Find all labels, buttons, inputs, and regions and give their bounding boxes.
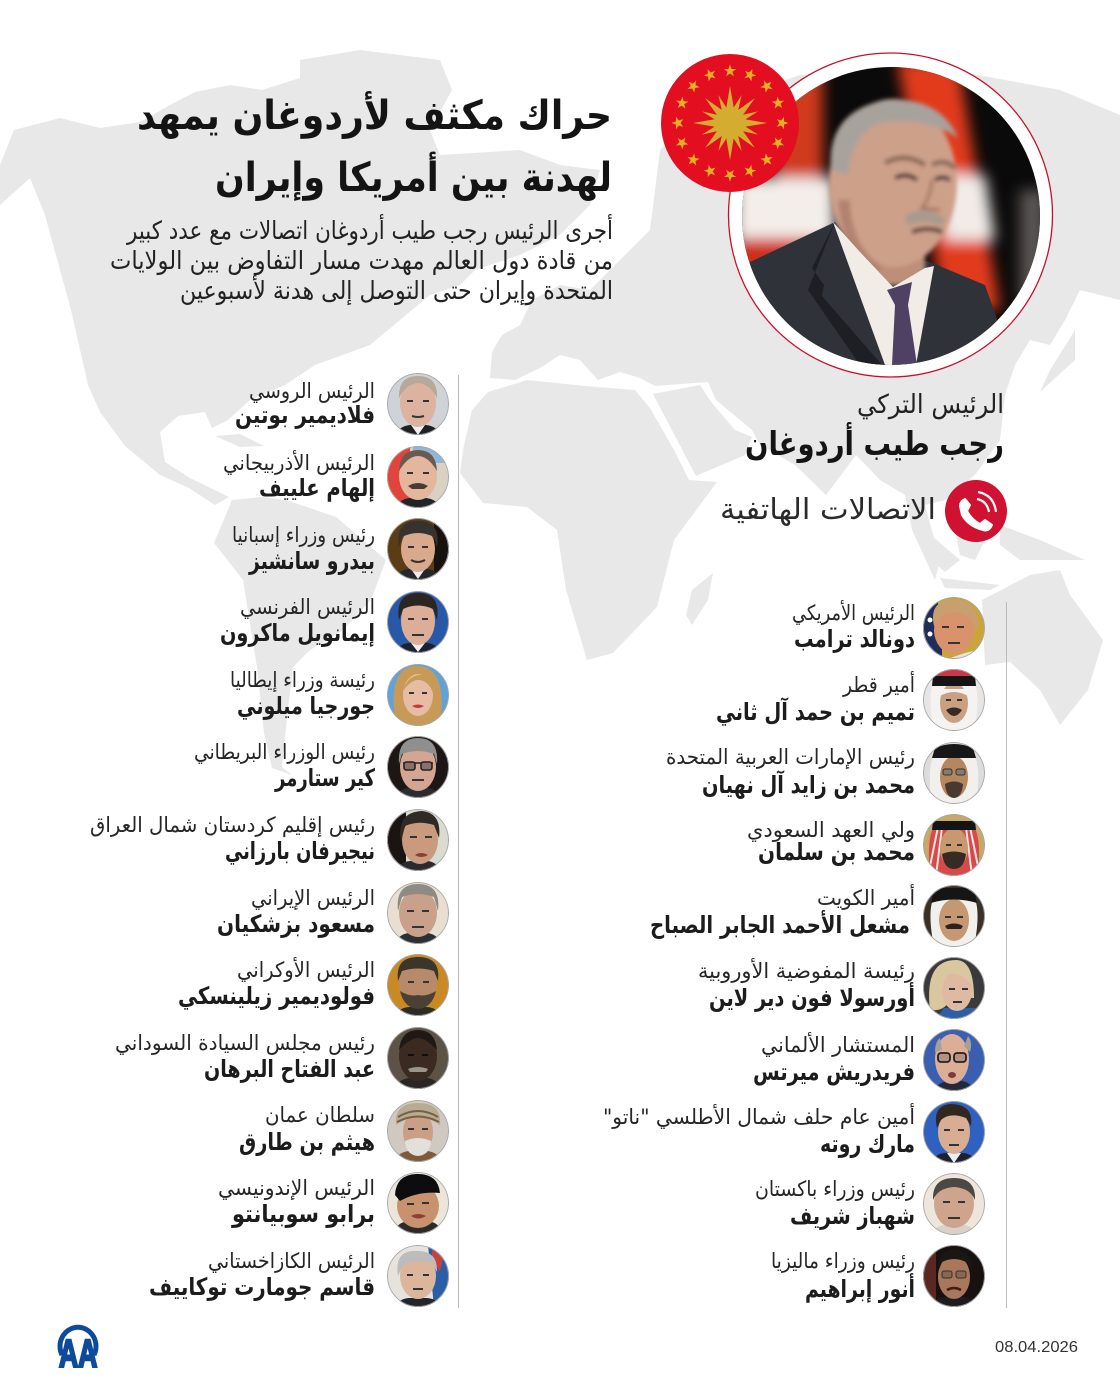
logo: Anadolu Agency: AA	[59, 1333, 97, 1376]
date: 08.04.2026	[995, 1339, 1078, 1356]
person: Barzani: نيجيرفان بارزاني	[225, 837, 375, 865]
person: Mishal	[650, 884, 985, 947]
Erdogan role and name: الرئيس التركي	[857, 390, 1004, 420]
title	[137, 90, 612, 201]
person: Prabowo: الرئيس الإندونيسي	[218, 1176, 375, 1200]
person: Macron	[220, 591, 449, 653]
person: Aliyev: الرئيس الأذربيجاني	[223, 450, 375, 475]
person: von der Leyen	[698, 957, 985, 1019]
person: Burhan: رئيس مجلس السيادة السوداني	[115, 1031, 375, 1055]
person: Prabowo: برابو سوبيانتو	[231, 1200, 375, 1228]
person: Starmer: رئيس الوزراء البريطاني	[194, 740, 375, 764]
person: Merz: المستشار الألماني	[761, 1032, 915, 1057]
person: Haitham: سلطان عمان	[265, 1103, 375, 1127]
person: Aliyev: إلهام علييف	[259, 474, 375, 502]
person: Pezeshkian: الرئيس الإيراني	[251, 886, 375, 910]
person: Prabowo	[218, 1172, 449, 1234]
person: Tamim: تميم بن حمد آل ثاني	[716, 697, 915, 726]
person: Zelensky	[178, 954, 449, 1016]
intro paragraph	[110, 213, 613, 306]
person: Sanchez: رئيس وزراء إسبانيا	[232, 523, 375, 548]
person: Burhan: عبد الفتاح البرهان	[204, 1055, 375, 1083]
person: Mohammed bin Salman: ولي العهد السعودي	[747, 818, 915, 842]
icon: phone	[945, 480, 1007, 542]
person: Starmer	[194, 736, 449, 798]
person: Anwar	[771, 1245, 985, 1307]
person: Pezeshkian: مسعود بزشكيان	[217, 910, 375, 938]
world map background	[0, 50, 1120, 775]
person: Anwar: رئيس وزراء ماليزيا	[771, 1249, 915, 1273]
person: Sharif	[755, 1173, 985, 1235]
person: Barzani: رئيس إقليم كردستان شمال العراق	[90, 813, 375, 838]
person: Macron: الرئيس الفرنسي	[240, 595, 375, 619]
person: Sharif: رئيس وزراء باكستان	[755, 1177, 915, 1201]
person: Anwar: أنور إبراهيم	[805, 1273, 915, 1303]
person: Haitham	[239, 1100, 449, 1162]
person: Rutte: مارك روته	[820, 1130, 915, 1158]
person: Trump	[792, 597, 985, 659]
person: Tamim: أمير قطر	[842, 671, 915, 697]
person: Haitham: هيثم بن طارق	[239, 1128, 375, 1156]
title: حراك مكثف لأردوغان يمهد	[137, 90, 612, 139]
person: Mohammed bin Salman: محمد بن سلمان	[758, 838, 915, 866]
intro paragraph: المتحدة وإيران حتى التوصل إلى هدنة لأسبوعين	[180, 274, 613, 306]
person: Mohamed bin Zayed: رئيس الإمارات العربية المتحدة	[666, 745, 915, 769]
title: لهدنة بين أمريكا وإيران	[215, 151, 612, 201]
person: Meloni: جورجيا ميلوني	[237, 692, 375, 720]
person: Starmer: كير ستارمر	[274, 764, 375, 792]
person: Pezeshkian	[217, 882, 449, 944]
person: Mishal: أمير الكويت	[817, 884, 915, 910]
Erdogan role and name	[745, 390, 1004, 464]
portrait: Erdogan	[728, 53, 1052, 380]
person: Sharif: شهباز شريف	[790, 1202, 915, 1230]
heading: phone calls: الاتصالات الهاتفية	[720, 492, 936, 526]
person: Burhan	[115, 1027, 449, 1089]
person: Tokayev: قاسم جومارت توكاييف	[149, 1273, 375, 1301]
person: Tokayev	[149, 1245, 449, 1307]
person: Putin: الرئيس الروسي	[249, 379, 375, 403]
person: Trump: الرئيس الأمريكي	[792, 600, 915, 625]
person: Tamim	[716, 666, 985, 731]
person: Zelensky: فولوديمير زيلينسكي	[178, 982, 375, 1010]
person: Zelensky: الرئيس الأوكراني	[237, 957, 375, 982]
intro paragraph: أجرى الرئيس رجب طيب أردوغان اتصالات مع عدد كبير	[125, 213, 613, 246]
Erdogan role and name: رجب طيب أردوغان	[745, 422, 1004, 464]
person: Barzani	[90, 809, 449, 871]
person: Rutte	[603, 1101, 985, 1163]
person: Trump: دونالد ترامب	[794, 625, 915, 653]
person: von der Leyen: أورسولا فون دير لاين	[709, 982, 915, 1012]
intro paragraph: من قادة دول العالم مهدت مسار التفاوض بين الولايات	[110, 246, 613, 276]
person: Merz	[753, 1029, 985, 1091]
person: Rutte: أمين عام حلف شمال الأطلسي "ناتو"	[603, 1103, 915, 1129]
person: Tokayev: الرئيس الكازاخستاني	[208, 1249, 375, 1273]
person: Mohamed bin Zayed	[666, 742, 985, 804]
person: Sanchez	[232, 518, 449, 580]
person: Mohammed bin Salman	[747, 814, 985, 876]
person: Meloni	[230, 664, 449, 726]
person: Mishal: مشعل الأحمد الجابر الصباح	[650, 910, 910, 939]
person: Meloni: رئيسة وزراء إيطاليا	[230, 668, 375, 693]
divider right column	[1006, 602, 1007, 1308]
person: Mohamed bin Zayed: محمد بن زايد آل نهيان	[702, 770, 915, 799]
person: Putin: فلاديمير بوتين	[235, 401, 375, 429]
divider left column	[458, 375, 459, 1308]
person: von der Leyen: رئيسة المفوضية الأوروبية	[698, 958, 915, 983]
person: Merz: فريدريش ميرتس	[753, 1058, 915, 1086]
person: Aliyev	[223, 446, 449, 508]
person: Sanchez: بيدرو سانشيز	[248, 547, 375, 575]
emblem: presidential seal	[661, 54, 799, 192]
person: Putin	[235, 373, 449, 435]
person: Macron: إيمانويل ماكرون	[220, 619, 375, 647]
